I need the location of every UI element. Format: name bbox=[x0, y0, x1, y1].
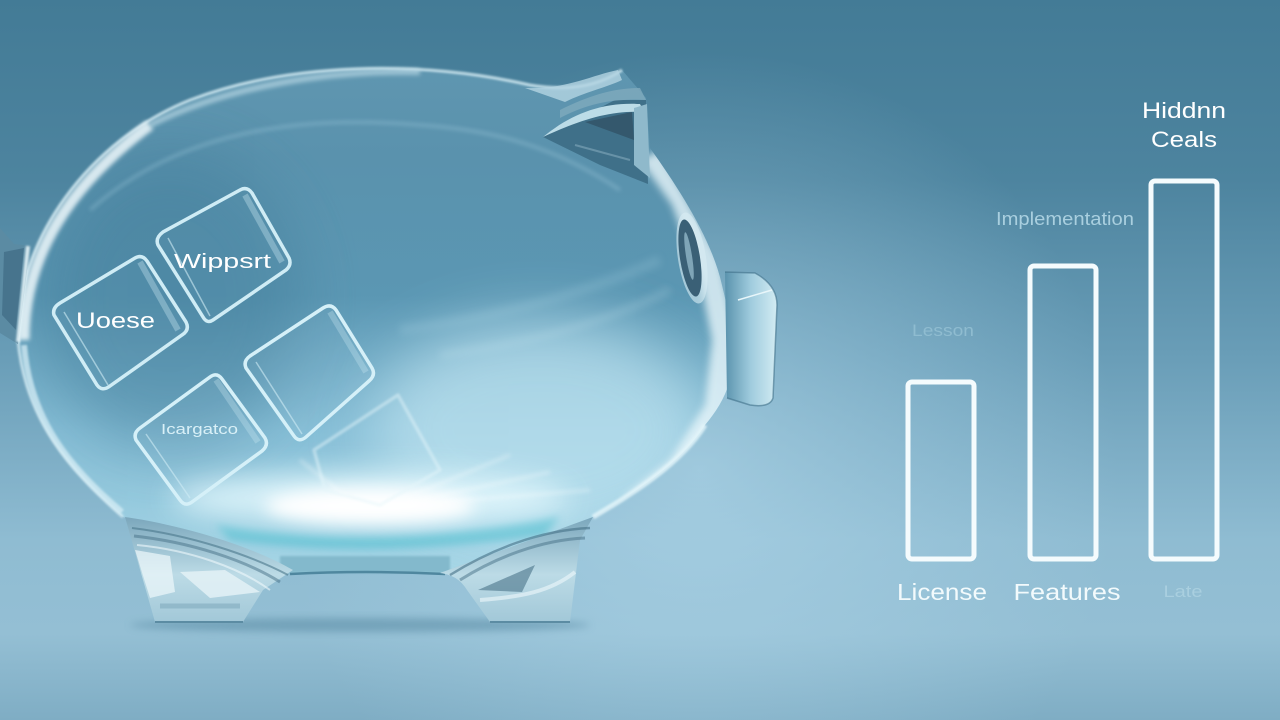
cube: Wippsrt bbox=[157, 189, 290, 321]
bar chart: Ceals bbox=[1151, 127, 1217, 152]
cube: Uoese: Uoese bbox=[76, 308, 155, 333]
snout bbox=[725, 272, 777, 406]
cube: empty bbox=[245, 306, 373, 440]
heading: Hidden Costs: Hiddnn bbox=[1142, 98, 1226, 123]
coin slot bbox=[671, 210, 713, 306]
cube: Uoese bbox=[54, 257, 187, 389]
piggy bank bbox=[0, 68, 777, 622]
glass rim bbox=[18, 68, 622, 517]
floor glow inside pig bbox=[170, 455, 590, 574]
bar chart bbox=[897, 98, 1226, 605]
cube: Wippsrt: Wippsrt bbox=[174, 251, 272, 273]
label: License: License bbox=[897, 579, 987, 605]
ear bbox=[525, 70, 650, 184]
left foot bbox=[125, 517, 293, 622]
right foot bbox=[440, 517, 593, 622]
body interior shading bbox=[40, 122, 745, 540]
label: bar 1 top: Lesson bbox=[912, 321, 974, 340]
bar: features bbox=[1030, 266, 1096, 559]
bar: license bbox=[908, 382, 974, 559]
tail bbox=[0, 228, 30, 344]
cube: faded lower bbox=[314, 395, 440, 505]
bar: hidden costs bbox=[1151, 181, 1217, 559]
cube: lower left bbox=[135, 375, 266, 504]
label: Late: Late bbox=[1164, 582, 1202, 601]
label: bar 2 top: Implementation bbox=[996, 209, 1134, 229]
pig body bbox=[18, 68, 735, 573]
label: Features: Features bbox=[1014, 579, 1120, 605]
cube: lower left: Icargatco bbox=[161, 421, 238, 438]
